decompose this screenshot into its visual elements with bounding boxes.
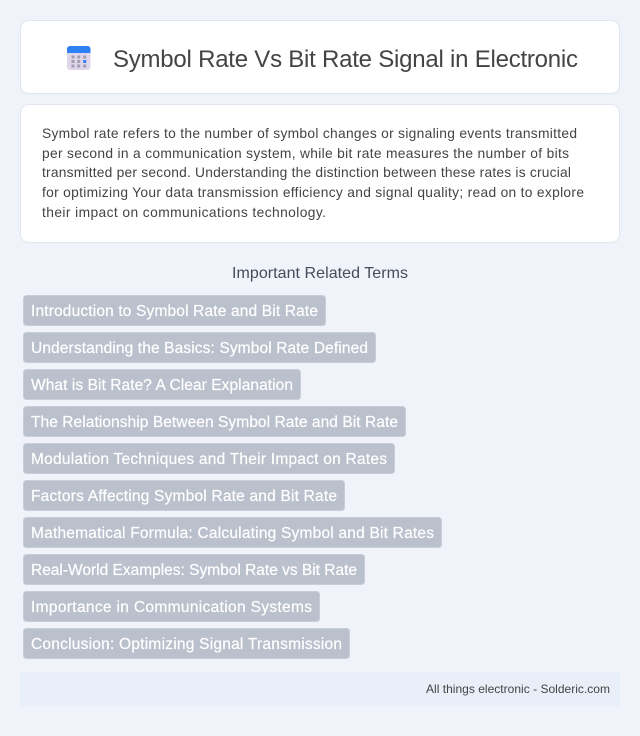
term chip 2 bbox=[24, 332, 376, 362]
term chip 9: Importance in Communication Systems bbox=[31, 599, 312, 616]
term chip 4 bbox=[24, 406, 406, 436]
term chip 6 bbox=[24, 480, 344, 510]
term chip 4: The Relationship Between Symbol Rate and Bit Rate bbox=[31, 414, 398, 431]
term chip 10: Conclusion: Optimizing Signal Transmission bbox=[31, 636, 342, 653]
term chip 5 bbox=[24, 444, 394, 474]
term chip 7 bbox=[24, 518, 442, 548]
intro text: their impact on communications technology. bbox=[42, 205, 326, 220]
icon: calendar grid bbox=[67, 46, 90, 70]
term chip 1: Introduction to Symbol Rate and Bit Rate bbox=[31, 303, 318, 320]
term chip 8 bbox=[24, 554, 364, 584]
heading: important related terms: Important Related Terms bbox=[232, 265, 408, 282]
term chip 1 bbox=[24, 296, 326, 326]
intro text: transmitted per second. Understanding the distinction between these rates is crucial bbox=[42, 165, 571, 180]
term chip 9 bbox=[24, 592, 320, 622]
intro text: Symbol rate refers to the number of symbol changes or signaling events transmitted bbox=[42, 126, 577, 141]
title: Symbol Rate Vs Bit Rate Signal in Electronic bbox=[113, 46, 578, 73]
term chip 6: Factors Affecting Symbol Rate and Bit Rate bbox=[31, 488, 337, 505]
term chip 7: Mathematical Formula: Calculating Symbol and Bit Rates bbox=[31, 525, 434, 542]
term chip 3 bbox=[24, 370, 300, 400]
footer text: All things electronic - Solderic.com bbox=[426, 682, 610, 696]
intro text: for optimizing Your data transmission efficiency and signal quality; read on to explore bbox=[42, 185, 584, 200]
term list bbox=[24, 296, 442, 658]
term chip 2: Understanding the Basics: Symbol Rate Defined bbox=[31, 340, 368, 357]
header card bbox=[20, 20, 620, 94]
term chip 5: Modulation Techniques and Their Impact on Rates bbox=[31, 451, 387, 468]
intro card bbox=[20, 104, 620, 242]
intro text: per second in a communication system, while bit rate measures the number of bits bbox=[42, 146, 569, 161]
term chip 8: Real-World Examples: Symbol Rate vs Bit Rate bbox=[31, 562, 357, 579]
intro text bbox=[42, 126, 584, 220]
footer bbox=[20, 672, 620, 706]
term chip 3: What is Bit Rate? A Clear Explanation bbox=[31, 377, 293, 394]
term chip 10 bbox=[24, 628, 350, 658]
